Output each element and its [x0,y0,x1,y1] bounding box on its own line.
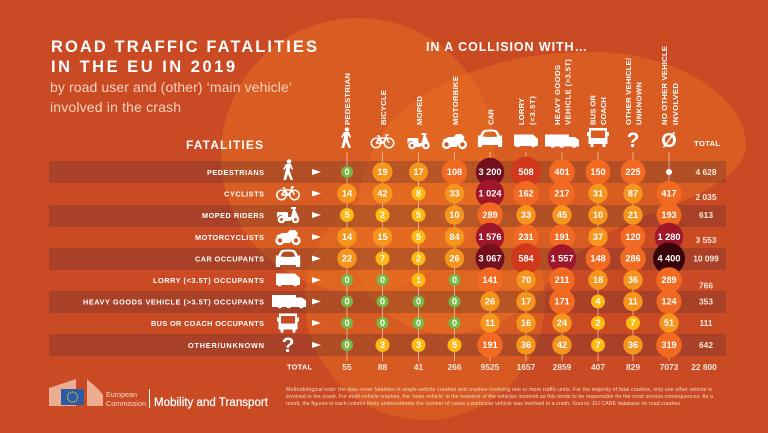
bubbles: 19 [377,167,388,177]
bubbles: 0 [344,340,350,350]
bubbles: 0 [344,275,350,285]
bubbles: 286 [625,254,641,264]
bubbles: 0 [416,318,421,328]
column totals: 407 [591,362,605,372]
bubbles: 3 [416,340,421,350]
bubbles: 5 [452,340,457,350]
header: moped: MOPED [415,96,424,125]
icon [277,187,299,200]
bubbles: 124 [661,296,678,306]
bubbles: 120 [625,232,641,242]
row bands [49,161,726,356]
column totals [342,362,717,372]
bubbles: 2 [595,318,601,328]
bubbles: 217 [554,188,570,198]
bubbles: 37 [593,232,603,242]
bubbles: 1 024 [478,188,502,198]
bubbles: 36 [628,275,638,285]
bubbles: 191 [554,232,570,242]
label: LORRY (<3.5T) OCCUPANTS [153,276,264,285]
bubbles: 193 [661,210,677,220]
bubbles: 171 [554,296,570,306]
methodological note: involved in the crash. For multi-vehicle crashes, the ‘main vehicle’ is the heaviest of the vehicles involved as this tends to be responsible for the most serious consequences. As a [286,394,713,400]
column totals: 266 [448,362,462,372]
icon [283,159,293,180]
label: BUS OR COACH OCCUPANTS [151,319,264,328]
bubbles: 11 [628,296,638,306]
column totals: 22 800 [691,362,717,372]
bubbles: 5 [416,232,421,242]
divider [149,389,150,408]
bubbles: 36 [521,340,531,350]
logo text: European [106,390,137,399]
bubbles: 4 400 [658,254,680,264]
bubbles: 51 [664,318,674,328]
bubbles: 1 557 [550,254,574,264]
methodological note [286,387,713,407]
label: PEDESTRIANS [207,168,264,177]
bubbles: 8 [416,188,421,198]
bubbles: 36 [628,340,638,350]
bubbles [337,223,683,251]
row total: 766 [699,280,713,290]
header: lorry: LORRY [517,98,526,125]
bubbles: 3 067 [478,254,502,264]
header: other vehicle unknown: OTHER VEHICLE/ [624,57,633,125]
header: lorry: (<3.5T) [528,96,537,125]
title: IN THE EU IN 2019 [51,58,235,76]
label: HEAVY GOODS VEHICLE (>3.5T) OCCUPANTS [83,298,264,306]
bubbles [337,179,682,208]
arrow [312,256,321,262]
bubbles: 15 [377,232,388,242]
bubbles: 10 [449,210,460,220]
row total: 2 035 [696,192,717,202]
bubbles: 17 [413,167,424,177]
column totals: 1657 [517,362,536,372]
row: moped riders [202,202,713,228]
row total: 111 [699,318,713,328]
icon [276,274,300,286]
label: OTHER/UNKNOWN [188,341,264,350]
bubbles: 1 576 [478,232,502,242]
bubbles: 0 [344,296,350,306]
icon [272,295,306,308]
bubbles: 0 [380,296,385,306]
bubbles: 0 [380,275,385,285]
bubbles: 0 [452,296,457,306]
icon: bicycle [371,135,394,148]
bubbles: 508 [518,167,534,177]
header: car: CAR [486,109,496,125]
icon: unknown: ? [627,129,639,152]
bubbles: 3 [380,340,385,350]
icon: car [478,130,502,147]
arrow [312,342,321,348]
icon: lorry [514,134,538,147]
row total: 613 [699,210,713,220]
label: MOTORCYCLISTS [195,233,264,242]
column totals: 88 [378,362,387,372]
column totals: 41 [414,362,423,372]
bubbles [340,202,682,228]
column headers [343,46,720,148]
bubbles: 33 [521,210,531,220]
header: heavy goods vehicle: HEAVY GOODS [553,65,562,125]
bubbles: 584 [518,254,535,264]
bubbles: 5 [344,210,350,220]
header: total: TOTAL [694,139,720,148]
arrow [312,169,321,175]
bubbles: 4 [595,296,601,306]
subtitle [50,79,292,115]
bubbles: 7 [630,318,636,328]
arrow [312,298,321,304]
building wings [49,379,103,406]
header: bus or coach [588,95,608,125]
icon [276,250,300,267]
label: CAR OCCUPANTS [195,254,264,264]
icon: ? [282,334,294,357]
header: bus or coach: BUS OR [588,95,598,125]
bubbles: 1 [416,275,421,285]
label: CYCLISTS [224,190,264,198]
bubbles: 289 [482,210,498,220]
header: motorbike: MOTORBIKE [451,76,460,125]
bubbles: 0 [344,167,350,177]
flag stars [68,392,78,402]
European Commission logo: Commission [106,399,146,408]
heading: fatalities: FATALITIES [186,138,263,152]
bubbles: 211 [555,275,569,285]
Mobility and Transport: Mobility and Transport [154,397,269,409]
European Commission logo [49,379,146,408]
bubbles: 5 [416,210,421,220]
header: no other vehicle involved: NO OTHER VEHICLE [660,46,669,125]
bubbles: 7 [380,254,385,264]
bubbles: 18 [593,275,603,285]
background circles [221,18,746,420]
methodological note: result, the figures in each column likely underestimate the number of cases a particular vehicle was involved in a crash. Source: EU CARE database on road crashes [286,401,680,407]
bubbles: 16 [521,318,531,328]
bubbles: 0 [380,318,385,328]
bubbles: 14 [342,232,353,242]
row: bus or coach occupants [151,313,713,333]
header: heavy goods vehicle [553,59,572,125]
bubbles: 42 [557,340,567,350]
header: other vehicle unknown: UNKNOWN [634,82,644,125]
row total: 642 [699,340,713,350]
bubbles: 0 [344,318,350,328]
methodological note: Methodological note: the data cover fatalities in single-vehicle crashes and crashes involving one or more traffic units. For the majority of fatal crashes, only one other vehicle is [286,387,712,393]
bubbles: 162 [518,188,534,198]
bubbles: 21 [628,210,638,220]
heading: in a collision with: IN A COLLISION WITH… [426,40,587,54]
bubbles: 401 [554,167,570,177]
bubbles: 14 [342,188,353,198]
bubbles: 191 [482,340,498,350]
bubbles: 289 [661,275,677,285]
bubbles: 26 [485,296,495,306]
bubbles [341,332,682,358]
row total: 10 099 [693,254,719,264]
bubbles: 148 [590,254,606,264]
row: heavy goods vehicle occupants [83,289,713,314]
bubbles: 17 [521,296,531,306]
row total: 353 [699,296,713,306]
header: other vehicle unknown [624,57,644,125]
bubbles: 3 200 [478,167,502,177]
title: ROAD TRAFFIC FATALITIES [51,38,317,56]
column totals: 55 [342,362,352,372]
EU flag [61,389,84,405]
icon: bus [587,128,609,147]
row: other/unknown [188,332,713,358]
bubbles: 22 [342,254,352,264]
bubbles: 26 [449,254,460,264]
icon: heavy goods vehicle [545,134,579,148]
bubbles: 45 [557,210,567,220]
bubbles [341,157,672,187]
subtitle: involved in the crash [50,99,181,115]
bubbles: 1 280 [658,232,680,242]
icon: no vehicle: Ø [661,130,677,152]
bubbles [341,289,682,314]
arrow [312,190,321,196]
bubbles: 42 [377,188,388,198]
bubbles [341,313,679,333]
row: pedestrians [207,157,717,187]
icon: motorbike [442,134,467,149]
bubbles: 231 [518,232,534,242]
bubbles: 84 [449,232,460,242]
bubbles: 11 [485,318,495,328]
header: lorry [517,96,537,125]
bubbles: 141 [482,275,498,285]
bubbles: 2 [416,254,421,264]
column totals: 829 [626,362,640,372]
bubbles: 225 [625,167,641,177]
icon: pedestrian [341,127,351,148]
row: lorry occupants [153,267,713,293]
header: heavy goods vehicle: VEHICLE (>3.5T) [564,59,572,125]
bubbles: 24 [557,318,568,328]
bubbles: 2 [380,210,385,220]
header: pedestrian: PEDESTRIAN [343,73,352,125]
arrow [312,320,321,326]
arrow [312,234,321,240]
bubbles: 150 [590,167,606,177]
bubbles: 319 [661,340,677,350]
column totals: 2859 [553,362,572,372]
bubbles: 33 [449,188,460,198]
bubbles: 0 [452,275,457,285]
icon [277,314,299,332]
row: motorcyclists [195,223,717,251]
bubbles: 108 [447,167,462,177]
header: bus or coach: COACH [599,97,608,125]
header: no other vehicle involved [660,46,680,125]
column totals: 9525 [481,362,500,372]
icon [277,207,299,223]
bubbles: 7 [595,340,601,350]
column totals: 7073 [660,362,679,372]
row: car occupants [195,242,719,274]
bubbles: 0 [416,296,421,306]
row total: 4 628 [696,167,717,177]
column totals row [287,362,717,372]
bubbles [337,242,685,274]
column icons [341,127,677,152]
bubbles [341,267,682,293]
icon: moped [408,133,430,149]
icon [275,230,301,245]
bubbles: 31 [593,188,603,198]
bubbles: 417 [661,188,677,198]
bubbles: 10 [593,210,603,220]
bubbles: 0 [452,318,457,328]
subtitle: by road user and (other) ‘main vehicle’ [50,79,292,95]
label: MOPED RIDERS [202,211,264,220]
row total: 3 553 [696,235,717,245]
header: no other vehicle involved: INVOLVED [671,83,680,125]
header: bicycle: BICYCLE [379,90,388,125]
row: cyclists [224,179,717,208]
arrow [312,212,321,218]
bubbles: 70 [521,275,531,285]
column guide lines [347,152,669,361]
bubbles: 87 [628,188,638,198]
title [51,38,317,76]
arrow [312,277,321,283]
label: total: TOTAL [287,362,312,372]
